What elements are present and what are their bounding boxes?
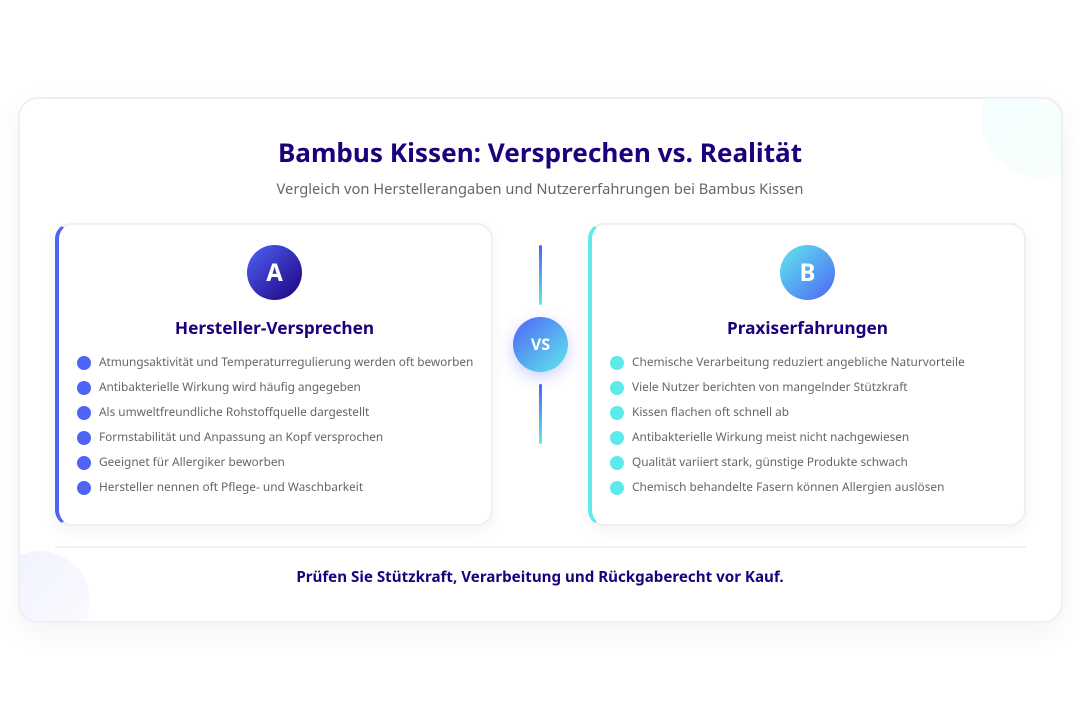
panel: Praxiserfahrungen [588, 223, 1026, 526]
list: user experiences [610, 354, 965, 495]
panel: Hersteller-Versprechen [55, 223, 493, 526]
icon: badge B [780, 245, 835, 300]
decorative circle: bottom left [0, 551, 90, 651]
list: manufacturer promises: Antibakterielle Wirkung wird häufig angegeben [99, 379, 361, 395]
list: user experiences: Qualität variiert stark, günstige Produkte schwach [632, 454, 908, 470]
icon: badge B: B [800, 256, 815, 289]
footer takeaway: Prüfen Sie Stützkraft, Verarbeitung und Rückgaberecht vor Kauf. [296, 567, 784, 587]
list: manufacturer promises: Hersteller nennen oft Pflege- und Waschbarkeit [99, 479, 363, 495]
title: Bambus Kissen: Versprechen vs. Realität [278, 134, 802, 170]
list: manufacturer promises: Atmungsaktivität und Temperaturregulierung werden oft beworben [99, 354, 473, 370]
list: user experiences: Chemische Verarbeitung reduziert angebliche Naturvorteile [632, 354, 965, 370]
icon: badge A: A [266, 256, 283, 289]
list: user experiences: Antibakterielle Wirkung meist nicht nachgewiesen [632, 429, 909, 445]
list: manufacturer promises [77, 354, 473, 495]
list: manufacturer promises: Formstabilität und Anpassung an Kopf versprochen [99, 429, 383, 445]
list: user experiences: Kissen flachen oft schnell ab [632, 404, 789, 420]
icon: VS badge: VS [531, 333, 550, 355]
icon: badge A [247, 245, 302, 300]
subtitle: Vergleich von Herstellerangaben und Nutzererfahrungen bei Bambus Kissen [277, 179, 803, 199]
panel heading A: Hersteller-Versprechen [175, 317, 374, 340]
list: manufacturer promises: Geeignet für Allergiker beworben [99, 454, 285, 470]
divider line: top [539, 245, 542, 305]
icon: VS badge [513, 317, 568, 372]
list: manufacturer promises: Als umweltfreundliche Rohstoffquelle dargestellt [99, 404, 369, 420]
main card [18, 97, 1063, 623]
divider line: bottom [539, 384, 542, 444]
panel heading B: Praxiserfahrungen [727, 317, 888, 340]
list: user experiences: Viele Nutzer berichten von mangelnder Stützkraft [632, 379, 908, 395]
list: user experiences: Chemisch behandelte Fasern können Allergien auslösen [632, 479, 944, 495]
decorative circle: top right [981, 58, 1080, 178]
